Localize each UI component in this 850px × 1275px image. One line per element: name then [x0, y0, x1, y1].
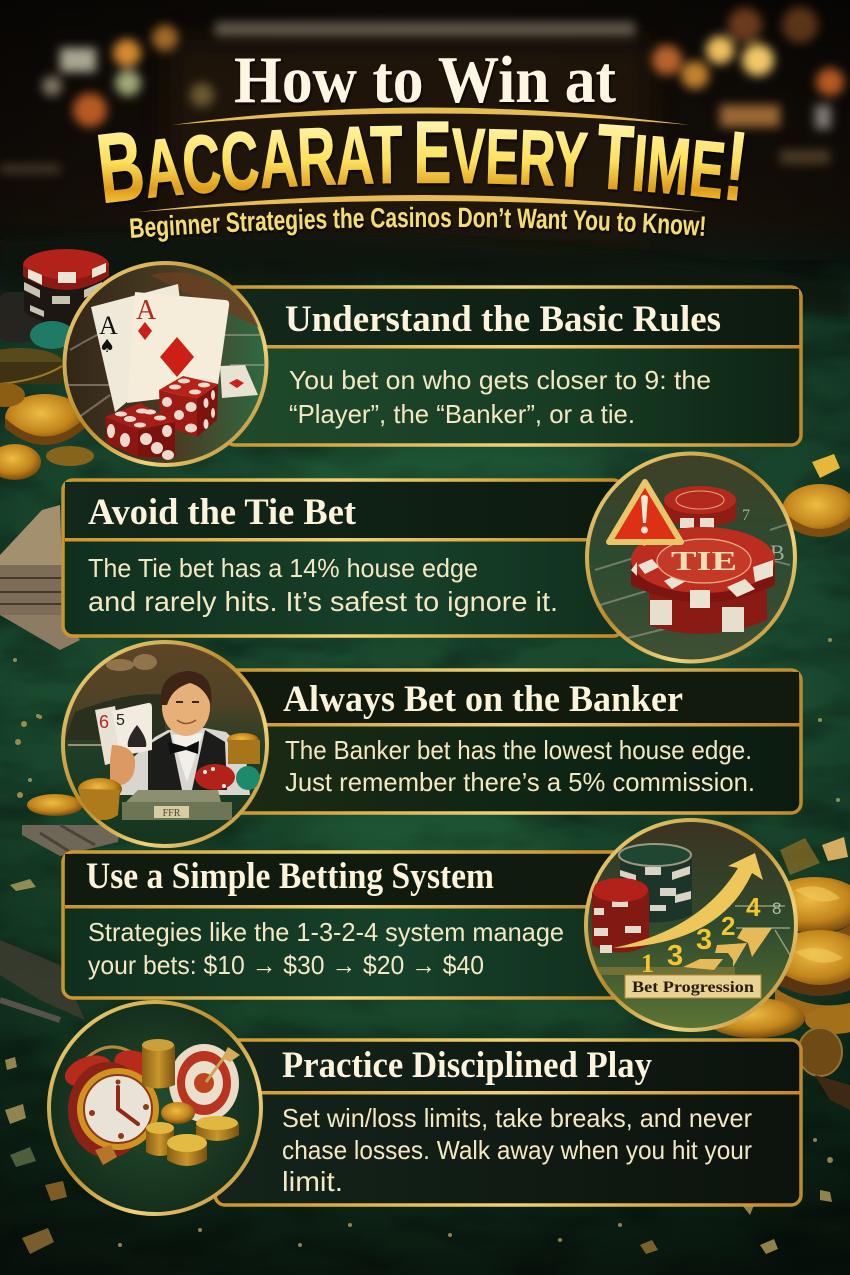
panel: always bet on the banker [225, 670, 801, 813]
progression numbers: 1 [641, 949, 654, 978]
big chip stack [631, 527, 775, 634]
body text: The Tie bet has a 14% house edge [88, 553, 478, 583]
panel: practice disciplined play: limit. [282, 1166, 343, 1197]
ace of diamonds card: A [136, 295, 157, 326]
progression numbers [643, 898, 760, 972]
progression numbers: 2 [721, 911, 735, 941]
held cards: 5 [116, 712, 125, 729]
panel: always bet on the banker: Just remember there’s a 5% commission. [285, 767, 755, 797]
bet progression label: Bet Progression [632, 979, 754, 996]
body text: Strategies like the 1-3-2-4 system manage [88, 917, 564, 947]
dartboard target [169, 1044, 240, 1122]
panel: avoid the tie bet [63, 480, 623, 636]
icon: smiling banker holding cards [63, 642, 267, 846]
alarm clock [61, 1046, 159, 1158]
dice [105, 376, 218, 460]
heading: Always Bet on the Banker [283, 679, 683, 720]
coin stacks [142, 1039, 239, 1166]
bet progression label [625, 975, 761, 998]
body text: Set win/loss limits, take breaks, and never [282, 1103, 752, 1133]
panel: avoid the tie bet: and rarely hits. It’s safest to ignore it. [88, 586, 558, 617]
decor: poker chips and gold coins, left [0, 249, 109, 480]
icon: tie chips and warning triangle [587, 454, 800, 662]
red chip stack [592, 878, 649, 953]
green chip stack [619, 844, 692, 922]
tray label: FFR [163, 808, 181, 819]
heading: Understand the Basic Rules [285, 299, 721, 340]
body text: You bet on who gets closer to 9: the [289, 365, 711, 395]
held cards: 6 [99, 712, 109, 732]
ace of diamonds card [127, 292, 229, 403]
progression numbers: 3 [696, 924, 712, 956]
TIE label: TIE [671, 546, 737, 576]
small chip stack [664, 486, 736, 528]
decor: banknotes, left [0, 505, 120, 1020]
decor: gold coins, right [705, 454, 850, 1110]
icon: tie chips and warning triangle: 7 [742, 507, 750, 524]
small card on table [220, 365, 258, 398]
title line: Baccarat Every Time!: BACCARAT EVERY TIME! [98, 121, 745, 204]
icon: bet progression chips and arrow [585, 820, 796, 1030]
subtitle: Beginner Strategies the Casinos Don’t Want You to Know! [130, 206, 706, 244]
rising gold arrow [613, 853, 763, 948]
heading: Use a Simple Betting System [86, 856, 494, 897]
icon: clock, target and coins [49, 1002, 261, 1214]
panel: use a simple betting system [63, 852, 623, 998]
progression numbers: 3 [667, 940, 683, 972]
step arrows [683, 928, 772, 970]
heading: Practice Disciplined Play [282, 1045, 652, 1086]
ace of spades card: ♠ [99, 336, 115, 357]
panel: understand the basic rules [225, 287, 801, 445]
ace of spades card: A [99, 311, 118, 340]
gold swoosh below Baccarat [138, 195, 705, 212]
body text: The Banker bet has the lowest house edge. [285, 735, 752, 765]
progression numbers: 4 [746, 892, 761, 922]
panel: practice disciplined play [215, 1040, 801, 1205]
ace of spades card [91, 284, 180, 412]
panel: understand the basic rules: “Player”, the “Banker”, or a tie. [289, 399, 635, 429]
held cards [95, 703, 152, 765]
decor: gold confetti [5, 638, 840, 1254]
heading: Avoid the Tie Bet [88, 492, 357, 533]
gold swoosh above Baccarat [172, 108, 690, 125]
title block [98, 43, 745, 244]
panel: practice disciplined play: chase losses. Walk away when you hit your [282, 1135, 752, 1165]
panel: use a simple betting system: your bets: $10 → $30 → $20 → $40 [88, 950, 484, 980]
icon: tie chips and warning triangle: B [770, 540, 785, 565]
icon: bet progression chips and arrow: 8 [772, 899, 781, 918]
warning triangle [609, 482, 681, 542]
icon: playing cards and dice [64, 263, 266, 465]
title line: How to Win at: How to Win at [234, 43, 617, 117]
